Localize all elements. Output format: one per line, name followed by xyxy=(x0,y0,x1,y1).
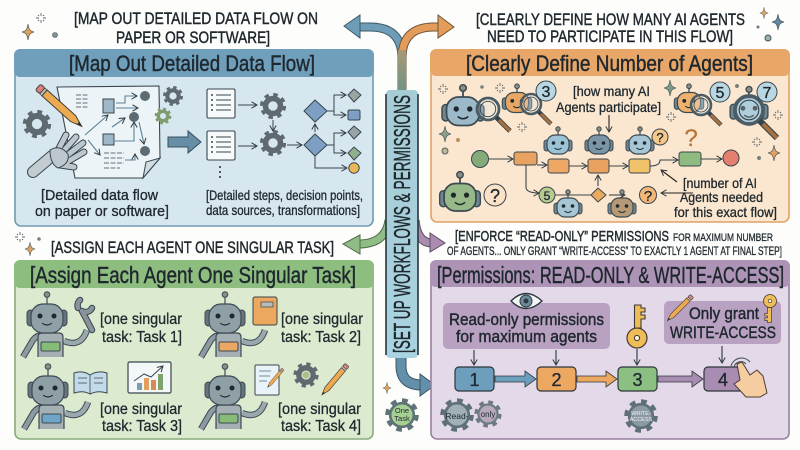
caption: detailed steps xyxy=(206,187,363,218)
question bubbles: ? xyxy=(656,130,664,145)
heading: clearly define agents xyxy=(476,10,745,46)
icon: gear left xyxy=(25,112,49,136)
heading: enforce read-only permissions: [ENFORCE “READ-ONLY” PERMISSIONS xyxy=(455,228,669,245)
panel: assign each agent one singular task xyxy=(14,260,374,439)
task 3 label: task: Task 3] xyxy=(102,418,182,435)
callout: read-only permissions xyxy=(443,303,610,349)
robot group of five xyxy=(674,82,730,125)
vertical column xyxy=(386,90,418,358)
panel title: [Assign Each Agent One Singular Task] xyxy=(30,262,356,288)
task 4 label xyxy=(278,401,362,435)
caption: how many agents xyxy=(556,83,661,115)
caption: how many agents: Agents participate] xyxy=(556,99,661,115)
icon: small key xyxy=(764,294,776,322)
gear: write-access: ACCESS xyxy=(630,417,653,423)
decision diamonds xyxy=(304,89,361,173)
confused green robot: ? xyxy=(490,186,500,206)
arrow: right to permissions xyxy=(415,220,445,252)
robot with magnifier xyxy=(442,85,510,131)
step 4 xyxy=(704,367,745,391)
panel: map out detailed data flow xyxy=(14,49,374,226)
pointer arrows xyxy=(661,170,693,193)
robot group of five: 5 xyxy=(716,85,725,102)
agent task 1 xyxy=(23,292,92,357)
icon: gear green xyxy=(156,109,170,123)
task 3 label: [one singular xyxy=(100,401,183,418)
task 4 label: task: Task 4] xyxy=(281,418,361,435)
star near one task gear xyxy=(383,382,391,394)
icon: large key xyxy=(627,305,647,348)
callout: read-only permissions: for maximum agents xyxy=(456,327,597,346)
question bubbles: ? xyxy=(684,125,698,152)
arrow: step 2 to 3 xyxy=(577,371,617,387)
step 1: 1 xyxy=(469,370,480,390)
step 3 xyxy=(618,367,657,391)
panel: permissions read-only and write-access xyxy=(430,260,790,439)
decorative stars left of task heading xyxy=(15,232,41,256)
chart icon xyxy=(128,362,171,393)
panel: clearly define number of agents xyxy=(430,49,790,222)
gear: only: only xyxy=(481,410,495,419)
callout: read-only permissions: Read-only permissions xyxy=(449,310,604,329)
arrow: to middle agent xyxy=(608,115,610,132)
confused green robot xyxy=(440,172,506,211)
robot group of three xyxy=(502,81,556,124)
task 2 label: [one singular xyxy=(281,311,364,328)
gears and connectors xyxy=(238,105,302,146)
icon: pencil xyxy=(666,294,694,322)
step 3: 3 xyxy=(632,370,643,390)
task 1 label xyxy=(100,311,183,346)
heading: clearly define agents: NEED TO PARTICIPATE IN THIS FLOW] xyxy=(487,27,733,46)
permission down arrows xyxy=(474,346,722,365)
gear: read xyxy=(443,401,471,429)
caption: paper or software xyxy=(35,187,169,220)
heading: enforce read-only permissions: FOR MAXIMUM NUMBER xyxy=(673,232,773,244)
caption: number of agents needed: [number of AI xyxy=(683,175,757,191)
caption: number of agents needed xyxy=(674,175,777,220)
icon: pencil xyxy=(35,84,84,129)
one task gear: One xyxy=(395,406,409,415)
one task gear xyxy=(388,401,416,429)
caption: paper or software: [Detailed data flow xyxy=(41,187,158,204)
panel title: [Map Out Detailed Data Flow] xyxy=(69,51,315,76)
task 2 label xyxy=(281,311,364,346)
heading: map out detailed data flow: PAPER OR SOFTWARE] xyxy=(116,28,270,47)
caption: how many agents: [how many AI xyxy=(573,83,650,99)
heading: enforce read-only permissions xyxy=(447,228,782,258)
heading: map out detailed data flow: [MAP OUT DETAILED DATA FLOW ON xyxy=(74,9,318,28)
robot group of seven: 7 xyxy=(763,85,772,102)
icon: robot hand xyxy=(33,135,84,172)
panel header xyxy=(430,49,790,76)
step lists xyxy=(207,89,235,180)
arrow: up-left to data flow xyxy=(344,15,402,92)
gear pair xyxy=(262,95,284,154)
callout: only grant write-access: WRITE-ACCESS xyxy=(670,323,776,342)
gear: write-access: WRITE- xyxy=(631,411,651,417)
callout: only grant write-access xyxy=(664,301,781,344)
agent task 4 xyxy=(201,364,284,429)
step 1 xyxy=(455,367,494,391)
decorative sparkles xyxy=(438,80,783,161)
gear: read: Read- xyxy=(445,411,469,421)
arrow: step 3 to 4 xyxy=(658,371,703,387)
step 2: 2 xyxy=(551,370,562,390)
arrow: down-right to permissions steps xyxy=(401,355,435,396)
icon: eye xyxy=(511,294,542,308)
caption: paper or software: on paper or software] xyxy=(35,203,169,220)
panel header xyxy=(430,260,790,287)
paper diagram xyxy=(57,86,160,178)
caption: number of agents needed: for this exact flow] xyxy=(674,204,777,220)
gear: only xyxy=(476,402,500,426)
agent task 2 xyxy=(201,292,277,357)
callout: only grant write-access: Only grant xyxy=(689,304,759,323)
arrow: left to assign task xyxy=(343,220,389,254)
robot group of three: 3 xyxy=(542,84,551,101)
task 3 label xyxy=(100,401,183,435)
agent task 3 xyxy=(24,364,107,429)
decorative stars top right xyxy=(756,7,784,41)
panel header xyxy=(14,260,374,288)
caption: number of agents needed: Agents needed xyxy=(680,189,763,205)
step 2 xyxy=(537,367,576,391)
task 4 label: [one singular xyxy=(278,401,362,418)
question bubbles xyxy=(640,125,698,205)
arrow: up-right to agent count xyxy=(402,15,454,92)
flow robots xyxy=(544,127,654,217)
heading: map out detailed data flow xyxy=(74,9,318,47)
gear and pencil icons xyxy=(295,363,349,397)
icon: gear top xyxy=(164,87,182,105)
gear: write-access xyxy=(627,402,655,430)
question bubbles: ? xyxy=(644,188,652,205)
decorative stars top left xyxy=(22,13,58,40)
one task gear: Task xyxy=(394,414,410,423)
central hub: set up workflows and permissions xyxy=(343,15,454,396)
flow diagram xyxy=(472,150,739,203)
task 1 label: [one singular xyxy=(100,311,183,328)
icon: tapping hand xyxy=(731,358,767,397)
panel header xyxy=(14,49,374,77)
task 1 label: task: Task 1] xyxy=(102,329,182,346)
arrow: paper to steps xyxy=(168,131,201,153)
caption: detailed steps: data sources, transformations] xyxy=(206,202,360,218)
flow diagram: 5 xyxy=(544,189,551,203)
step 4: 4 xyxy=(718,370,728,390)
heading: assign each agent: [ASSIGN EACH AGENT ONE SINGULAR TASK] xyxy=(51,238,334,257)
task 2 label: task: Task 2] xyxy=(281,329,361,346)
arrow: step 1 to 2 xyxy=(495,371,536,387)
robot group of seven xyxy=(730,82,777,138)
caption: detailed steps: [Detailed steps, decision points, xyxy=(206,187,363,203)
panel title: [Clearly Define Number of Agents] xyxy=(466,51,753,76)
